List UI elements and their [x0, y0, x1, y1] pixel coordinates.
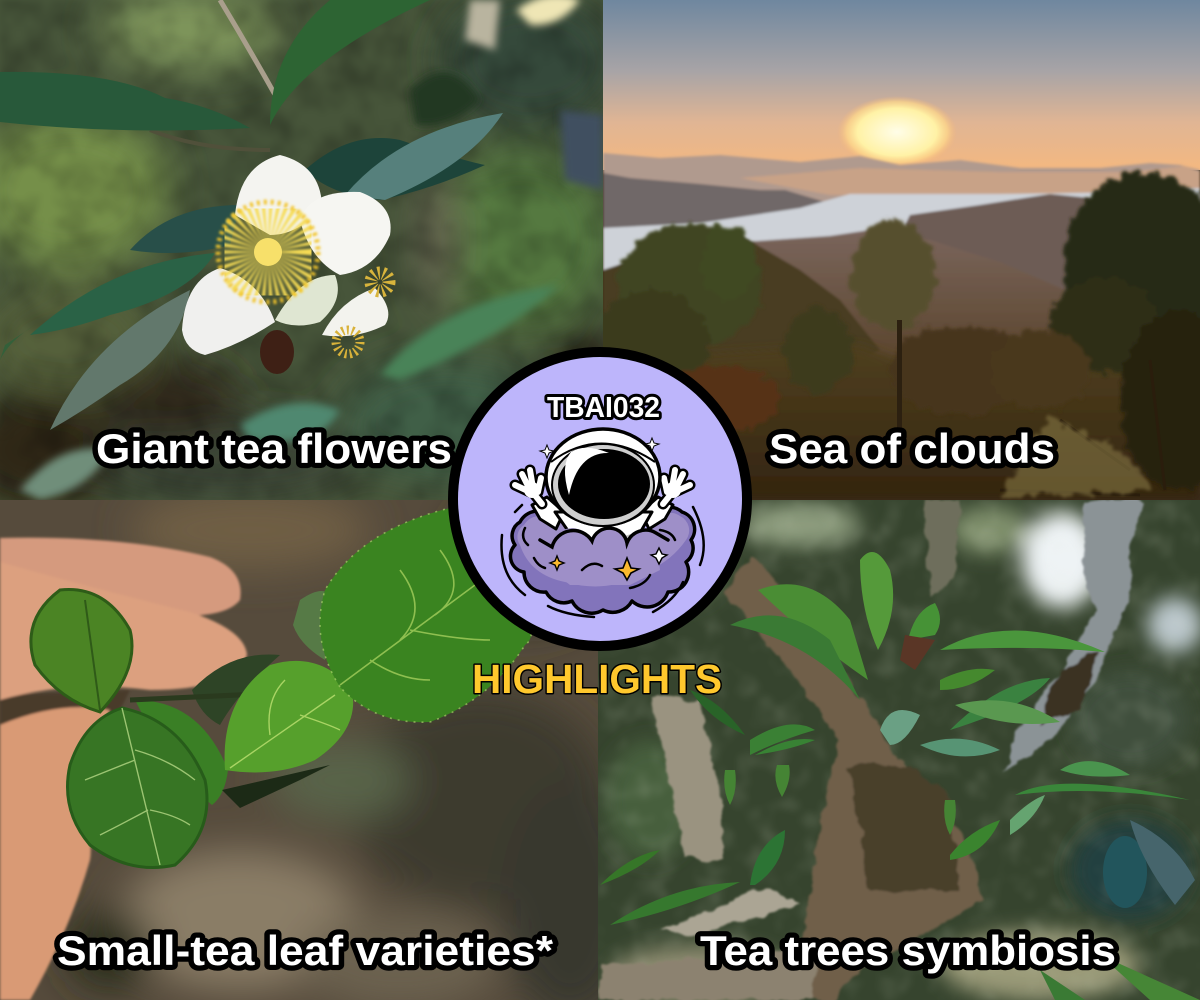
fingers: [0, 538, 247, 1000]
branches and trunk: [600, 500, 1142, 1000]
tea flower: [182, 155, 391, 374]
blurred background leaves: [20, 0, 603, 500]
badge circle: [453, 352, 747, 646]
caption: sea of clouds: Sea of clouds: [769, 425, 1055, 472]
leaves and stems: [0, 0, 503, 430]
forest foreground: [750, 351, 1188, 495]
tree trunk and ferns: [897, 320, 1165, 497]
orchid leaves: [600, 552, 1200, 1000]
panel: small-tea leaf varieties photo: [0, 490, 640, 1000]
panel: sea of clouds photo: [590, 0, 1200, 500]
canopy mottling: [598, 500, 1200, 1000]
badge code text: TBAI032: [547, 392, 660, 424]
background mottling: [0, 0, 603, 500]
icon: astronaut: [515, 429, 690, 546]
caption: giant tea flowers: Giant tea flowers: [96, 425, 452, 472]
icon: sparkles: [540, 438, 667, 580]
icon: cloud back: [501, 505, 704, 617]
panel: tea trees symbiosis photo: [598, 500, 1200, 1000]
mountain layers: [603, 152, 1200, 360]
tea leaves: [31, 508, 531, 868]
panel: giant tea flowers photo: [0, 0, 640, 510]
caption: tea trees symbiosis: Tea trees symbiosis: [700, 927, 1116, 974]
icon: cloud front: [523, 528, 675, 588]
trees: [590, 173, 1200, 490]
sun: [842, 97, 952, 164]
badge: central astronaut logo: [453, 352, 747, 646]
heading: highlights: HIGHLIGHTS: [472, 656, 722, 702]
caption: small-tea leaf varieties: Small-tea leaf varieties*: [57, 927, 554, 974]
